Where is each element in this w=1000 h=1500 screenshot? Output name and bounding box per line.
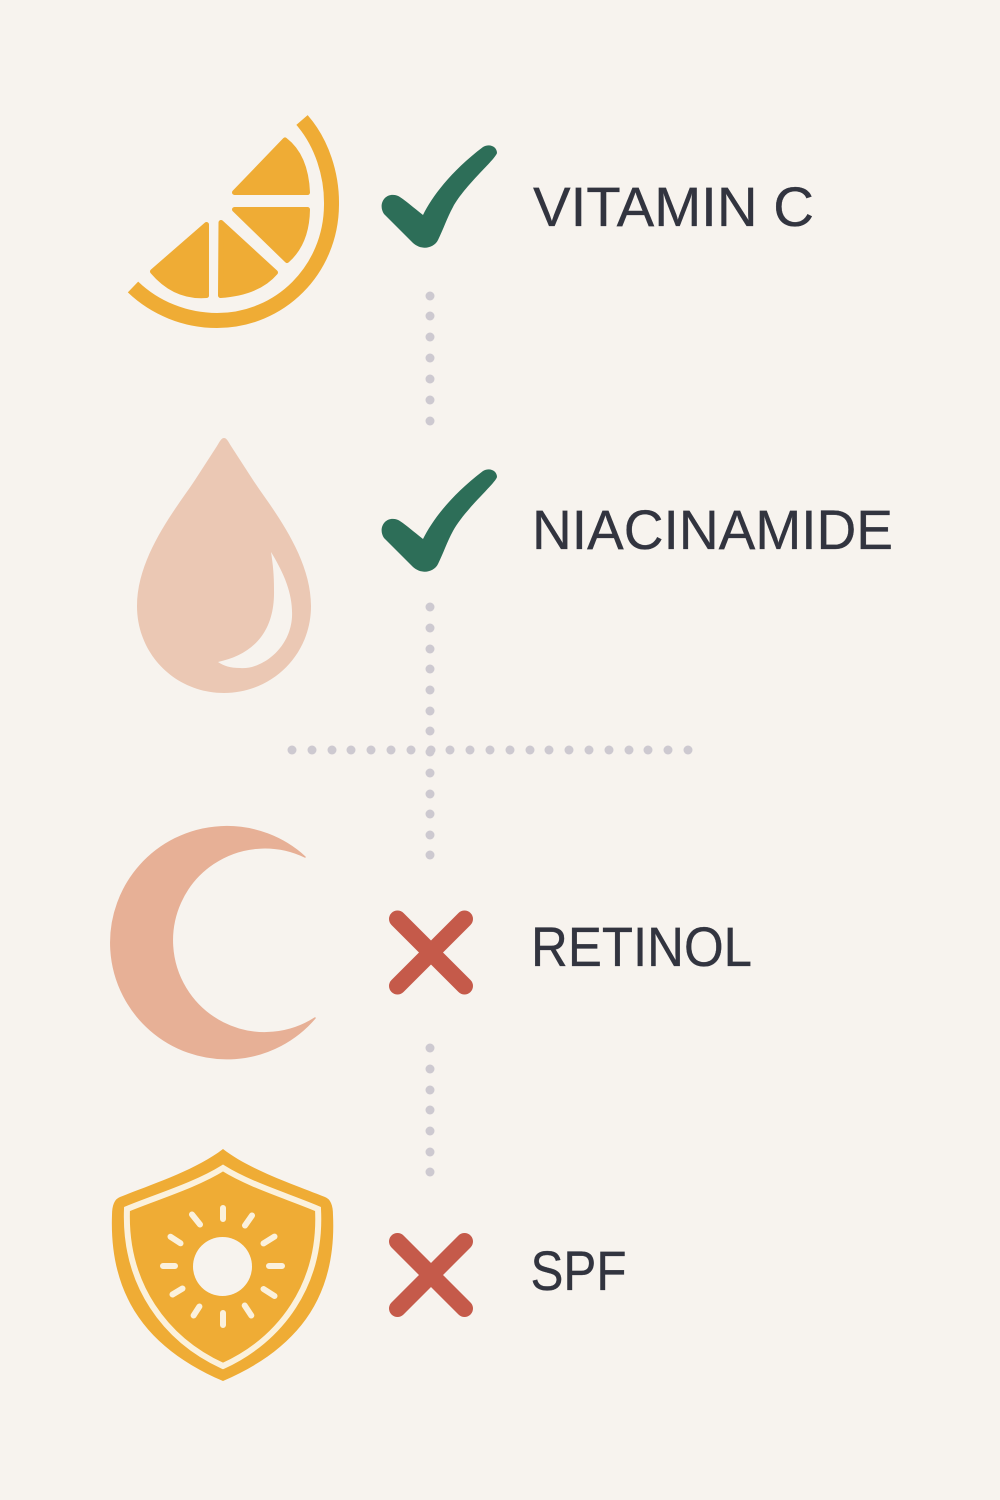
icon: shield with sun — [112, 1149, 333, 1381]
row: Retinol — [111, 827, 752, 1059]
connector: dotted line 3 — [426, 1044, 434, 1176]
label: Vitamin C: VITAMIN C — [533, 175, 814, 238]
icon: green check mark — [382, 469, 497, 572]
icon: orange slice — [133, 120, 332, 320]
row: SPF — [112, 1149, 627, 1381]
label: Niacinamide: NIACINAMIDE — [532, 498, 893, 561]
row: Niacinamide — [137, 438, 893, 693]
label: Retinol: RETINOL — [531, 915, 752, 978]
row: Vitamin C — [133, 120, 814, 320]
icon: red cross — [398, 919, 464, 986]
label: SPF: SPF — [530, 1239, 626, 1302]
connector: dotted cross — [288, 602, 692, 860]
icon: crescent moon — [111, 827, 315, 1059]
connector: dotted line 1 — [426, 292, 434, 426]
icon: red cross — [398, 1242, 464, 1308]
icon: water drop — [137, 438, 311, 693]
icon: green check mark — [382, 145, 497, 248]
